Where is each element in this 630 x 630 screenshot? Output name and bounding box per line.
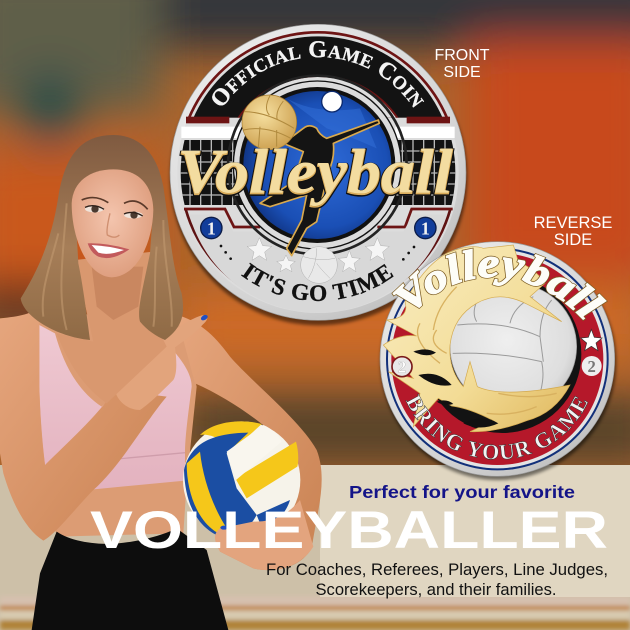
torso: [33, 313, 197, 537]
black leggings: [32, 528, 228, 630]
heading: official game coin: OFFICIAL GAME COIN: [212, 41, 424, 108]
woman with volleyball: [0, 135, 322, 630]
label: front side: SIDE: [443, 64, 481, 81]
audience text: For Coaches, Referees, Players, Line Judges,: [266, 560, 608, 579]
script title: Volleyball: Volleyball: [392, 248, 607, 320]
coin rim: [380, 242, 615, 476]
number badges: 1: [421, 218, 430, 238]
headline: volleyballer: VOLLEYBALLER: [90, 501, 608, 560]
top banner: [186, 31, 450, 124]
reverse coin: [378, 241, 618, 482]
number badges: 1: [207, 218, 216, 238]
silver badges: 2: [398, 358, 406, 377]
front arm: [0, 307, 167, 541]
net: [179, 140, 458, 205]
smile: [88, 243, 129, 258]
figure: jumping player: [260, 120, 379, 256]
silver badges: 2: [588, 357, 596, 376]
lower panel: [184, 208, 453, 285]
volleyball: [183, 421, 300, 539]
pink sports top: [39, 325, 192, 489]
script title: Volleyball: Volleyball: [392, 248, 608, 321]
number badges: [201, 217, 436, 239]
flame highlights: [417, 287, 557, 414]
label: reverse side: REVERSE: [534, 214, 612, 232]
pointing hand: [115, 315, 207, 410]
script title: Volleyball: Volleyball: [177, 137, 453, 207]
hair: [21, 135, 183, 340]
face: [72, 169, 153, 277]
neck and chest: [57, 252, 167, 403]
hand under ball: [215, 500, 313, 570]
audience text: [266, 560, 608, 599]
panel: text backdrop: [320, 465, 630, 597]
gold flames: [383, 245, 570, 432]
coin rim: [170, 24, 466, 320]
label: reverse side: SIDE: [554, 231, 592, 249]
eyes and brows: [82, 198, 148, 237]
motto: bring your game: BRING YOUR GAME: [405, 394, 588, 460]
hair strands: [43, 203, 172, 330]
motto: it's go time: IT'S GO TIME: [241, 262, 394, 302]
label: front side: [434, 47, 490, 81]
top hem: [107, 453, 185, 460]
script title: Volleyball: Volleyball: [177, 138, 453, 208]
gold volleyball: [242, 95, 297, 150]
black flame cut-outs: [413, 349, 498, 427]
tagline: Perfect for your favorite: [349, 482, 575, 502]
blue nail: [200, 314, 209, 322]
dots: [220, 245, 415, 261]
white net tape: [181, 127, 455, 138]
central blue medallion: [228, 76, 407, 254]
rear arm: [177, 315, 322, 570]
silver badges: [392, 329, 602, 377]
script title: Volleyball: Volleyball: [177, 137, 453, 207]
thumb nail: [220, 526, 228, 530]
neck shadow: [92, 267, 143, 320]
audience text: Scorekeepers, and their families.: [316, 580, 556, 599]
silver stars and mini ball: [247, 238, 389, 283]
label: front side: FRONT: [434, 47, 490, 64]
silver volleyball: [450, 283, 577, 410]
front coin: [168, 24, 470, 328]
label: reverse side: [534, 214, 612, 249]
